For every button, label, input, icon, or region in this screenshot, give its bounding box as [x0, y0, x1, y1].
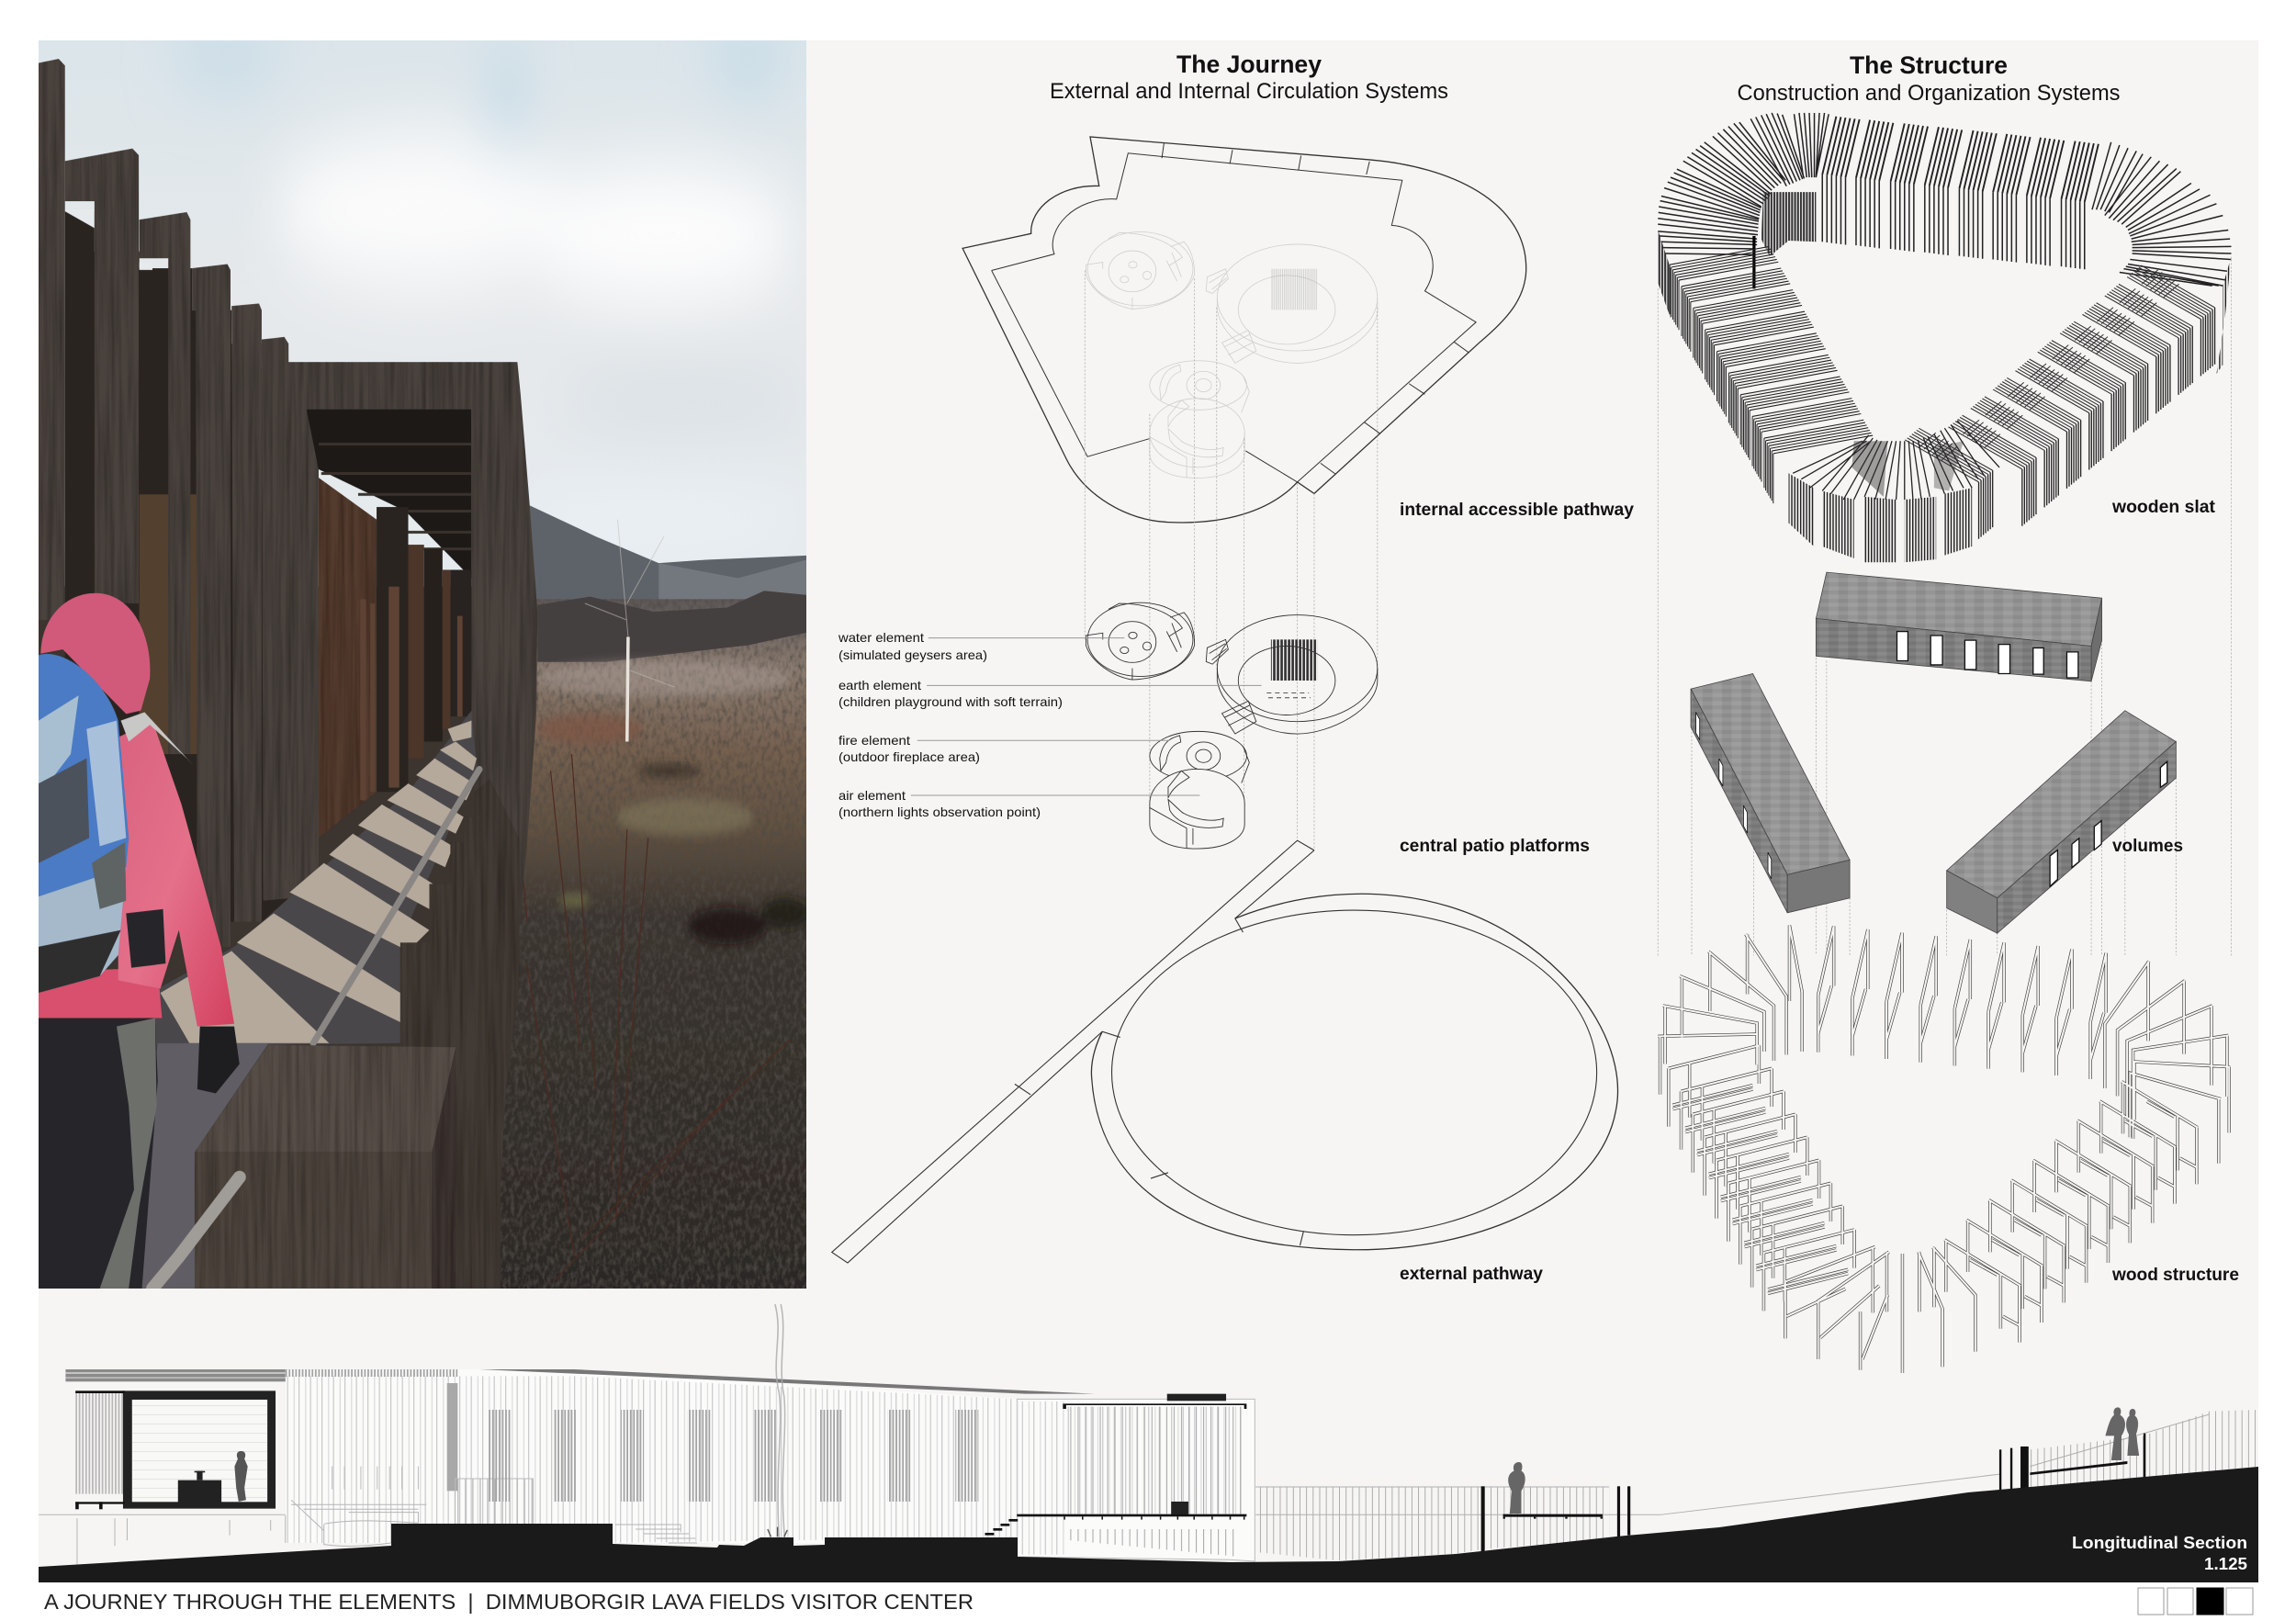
handrail: [313, 770, 479, 1043]
label: wooden slat: wooden slat: [2111, 498, 2216, 517]
diagram: timber frame ring: [1658, 925, 2230, 1373]
ghost element outlines: [1086, 232, 1378, 478]
page indicator squares: [2138, 1588, 2253, 1615]
black section posts and slabs: [1481, 1434, 2145, 1552]
boardwalk floor with shadow stripes: [126, 711, 477, 1289]
silhouette in room: [234, 1451, 248, 1502]
caption: longitudinal section: [2072, 1534, 2247, 1573]
birch tree and bushes: [511, 520, 791, 1282]
east volume: [1947, 711, 2176, 933]
element captions: (children playground with soft terrain): [838, 694, 1063, 709]
section: boardwalk and hill: [1255, 1407, 2258, 1560]
lava field ground: [501, 599, 806, 1289]
element captions: [838, 630, 1063, 819]
foreground timber post: [195, 1045, 456, 1289]
hero photo: boardwalk through timber fins: [39, 40, 806, 1289]
west volume: [1691, 674, 1850, 913]
stepped timber wall foreground: [400, 779, 519, 1289]
element captions: fire element: [838, 733, 910, 748]
ground: firepit plant: [768, 1527, 787, 1537]
furniture hints: [332, 1467, 418, 1490]
label: central patio platforms: central patio platforms: [1400, 837, 1590, 856]
heading: The Journey: External and Internal Circulation Systems: [1050, 79, 1448, 104]
steps: [985, 1519, 1018, 1536]
vertical dark slat panels: [488, 1410, 978, 1502]
element: fire platform: [1150, 731, 1249, 783]
right side slats: [1905, 265, 2215, 539]
covered walkway interior: [307, 409, 471, 838]
slatted elevation: [75, 1369, 1017, 1543]
leader lines: [911, 638, 1262, 795]
element captions: (outdoor fireplace area): [838, 749, 980, 764]
label: external pathway: external pathway: [1400, 1265, 1543, 1284]
sky: [39, 34, 812, 626]
back-left corner slats: [1658, 113, 1829, 288]
element captions: air element: [838, 788, 906, 803]
project title footer: A JOURNEY THROUGH THE ELEMENTS | DIMMUBORGIR LAVA FIELDS VISITOR CENTER: [44, 1590, 974, 1614]
heading: The Journey: [1050, 51, 1448, 104]
element: water platform: [1086, 602, 1195, 680]
element: earth platform: [1206, 615, 1378, 734]
label: internal accessible pathway: internal accessible pathway: [1400, 501, 1634, 520]
timber fins: [39, 59, 537, 1047]
timber building dark interior: [65, 209, 289, 922]
water vapour: [775, 1304, 785, 1540]
roof band: [65, 1369, 1095, 1394]
heading: The Journey: The Journey: [1176, 51, 1322, 78]
element captions: (northern lights observation point): [838, 805, 1041, 819]
element captions: earth element: [838, 678, 921, 692]
heading: The Structure: The Structure: [1850, 51, 2008, 79]
dotted projection lines: [1658, 259, 2231, 955]
mid fence: [1255, 1487, 1609, 1560]
hiker with backpack: [39, 593, 240, 1289]
external pathway and ring: [832, 840, 1618, 1263]
element captions: water element: [838, 630, 924, 645]
black ground profile: [39, 1467, 2258, 1582]
section: main building: [39, 1304, 1255, 1564]
silhouette on boardwalk: [1508, 1462, 1525, 1514]
diagram: wooden slat ring: [1658, 113, 2231, 955]
foreground handrail over post: [152, 1177, 240, 1289]
mountains: [530, 505, 806, 612]
internal accessible pathway plan: [962, 137, 1526, 523]
bottom corner slats: [1789, 421, 1999, 562]
base behind building: [39, 587, 513, 1289]
heading: The Structure: [1738, 51, 2120, 106]
caption: longitudinal section: 1.125: [2204, 1555, 2247, 1573]
longitudinal section drawing: [39, 1304, 2258, 1582]
silhouettes on ramp: [2105, 1407, 2139, 1460]
north volume: [1816, 572, 2102, 681]
left side slats: [1670, 246, 1873, 503]
back-right corner slats: [2092, 142, 2231, 286]
rising fence: [2030, 1410, 2258, 1488]
back side slats: [1822, 117, 2099, 269]
element captions: (simulated geysers area): [838, 647, 987, 662]
sectioned room: [75, 1390, 276, 1509]
outer left and right corner hanging slats: [1658, 231, 2231, 374]
ghost slat comb: [1271, 269, 1317, 310]
label: wood structure: wood structure: [2111, 1266, 2239, 1285]
diagram: journey exploded circulation axonometric: [832, 137, 1618, 1263]
understructure lines: [39, 1500, 697, 1564]
element: air platform: [1150, 769, 1244, 849]
lava ridge and field details: [537, 591, 809, 944]
east gallery: [1017, 1394, 1255, 1561]
heading: The Structure: Construction and Organization Systems: [1738, 81, 2120, 106]
label: volumes: volumes: [2112, 837, 2183, 856]
diagram: three timber volumes: [1691, 572, 2176, 933]
dotted projection lines: [1085, 271, 1378, 850]
caption: longitudinal section: Longitudinal Section: [2072, 1534, 2247, 1552]
